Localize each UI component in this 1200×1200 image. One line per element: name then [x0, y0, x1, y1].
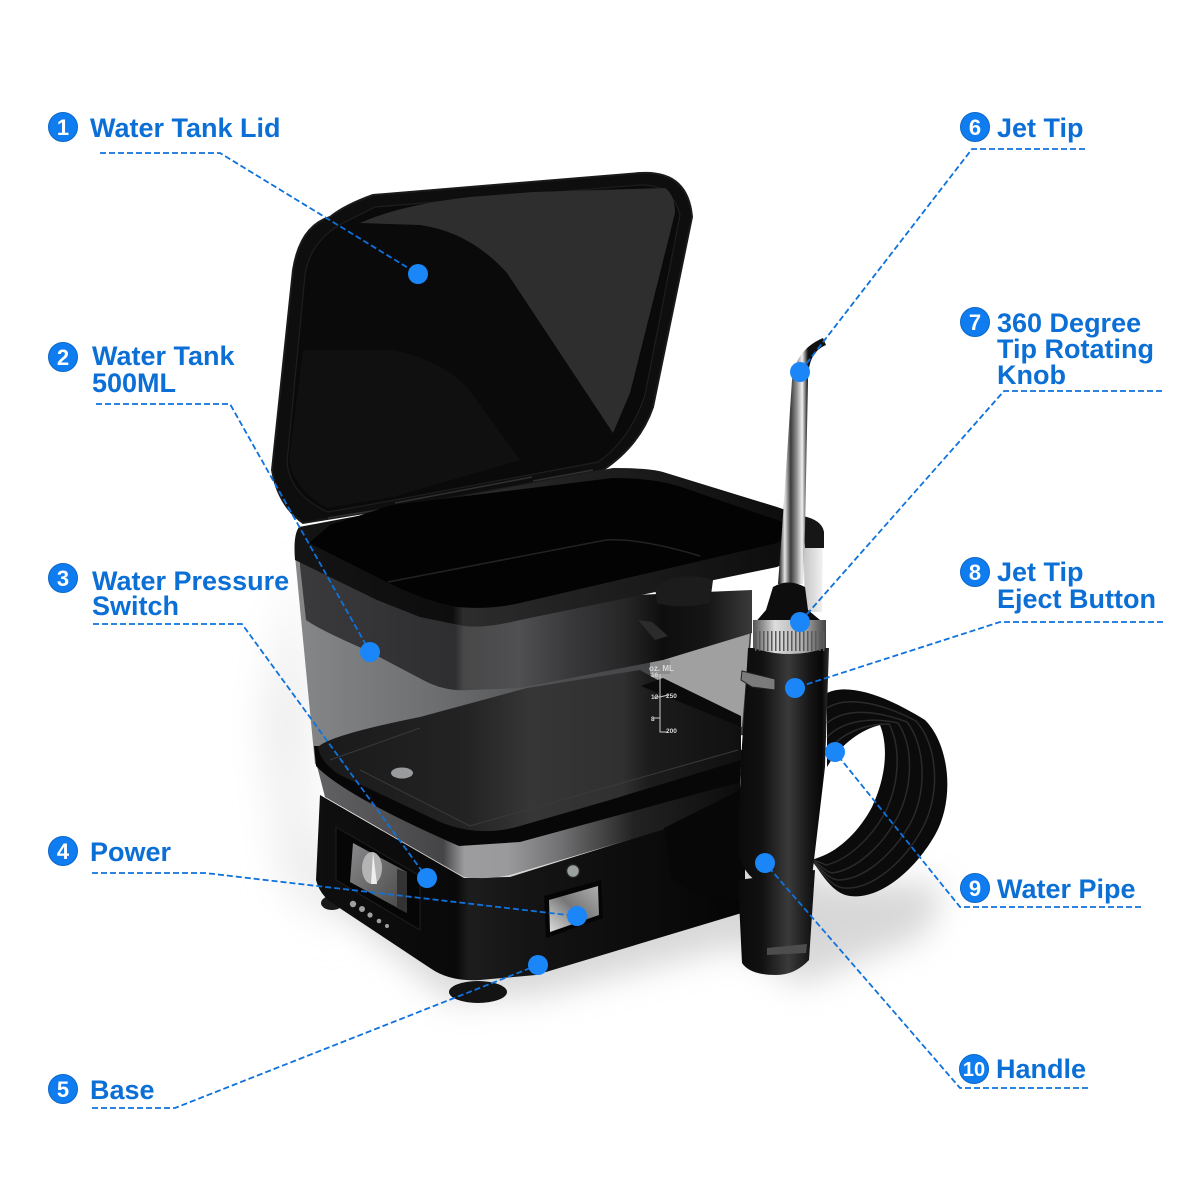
tank floor rim: [314, 746, 742, 846]
jet tip: [778, 338, 826, 584]
product: water flosser: [272, 173, 947, 1003]
label 10: Handle: Handle: [996, 1054, 1086, 1084]
label 3: Water Pressure Switch: 3: [57, 566, 69, 591]
base foot: [449, 981, 507, 1003]
soft shadow behind product: [270, 560, 945, 1000]
label 9: Water Pipe: Water Pipe: [997, 874, 1136, 904]
tank latch: [638, 620, 668, 640]
indicator light: [566, 864, 580, 878]
water tank lid: [272, 173, 692, 523]
power switch: [544, 880, 603, 938]
internal tubes: [664, 790, 745, 900]
scale: 200: [666, 728, 677, 735]
label 1: Water Tank Lid: 1: [57, 115, 69, 140]
label 7: 360 Degree Tip Rotating Knob: 360 Degree: [997, 308, 1141, 338]
label 10: Handle: 10: [963, 1059, 985, 1081]
tip cone: [753, 582, 826, 625]
label 2: Water Tank 500ML: 500ML: [92, 368, 176, 398]
label 5: Base: 5: [57, 1077, 69, 1102]
label 6: Jet Tip: [960, 112, 1084, 143]
clear sleeve: [803, 518, 823, 612]
scale: 8: [651, 716, 655, 723]
rear foot: [321, 896, 343, 910]
label 5: Base: [48, 1074, 155, 1105]
label 3: Water Pressure Switch: Water Pressure: [92, 566, 289, 596]
eject button: [741, 671, 775, 690]
label 7: 360 Degree Tip Rotating Knob: 7: [969, 310, 981, 335]
label 4: Power: Power: [90, 837, 172, 867]
callout dots: [360, 264, 845, 975]
tank smoked band: [300, 540, 752, 690]
tank floor: [318, 670, 741, 831]
label 1: Water Tank Lid: Water Tank Lid: [90, 113, 281, 143]
water tank: [294, 468, 822, 846]
scale: 16: [651, 672, 659, 679]
pressure dial panel: [336, 827, 420, 930]
label 4: Power: [48, 836, 172, 867]
label 8: Jet Tip Eject Button: [960, 557, 1156, 614]
floor outline: [330, 728, 738, 826]
base: [316, 785, 745, 980]
scale: oz. ML: [649, 664, 674, 673]
label 2: Water Tank 500ML: [48, 341, 236, 398]
water pipe: [812, 689, 947, 896]
label 2: Water Tank 500ML: 2: [57, 345, 69, 370]
knurled collar: [753, 620, 826, 654]
sleeve top: [803, 516, 824, 548]
tank rim: [294, 468, 822, 627]
scale: 12: [651, 694, 659, 701]
label 8: Jet Tip Eject Button: Jet Tip: [997, 557, 1084, 587]
label 8: Jet Tip Eject Button: Eject Button: [997, 584, 1156, 614]
callout lines: [92, 149, 1163, 1108]
adjuster knob: [655, 576, 713, 606]
tank opening: [309, 478, 800, 608]
tank clear wall: [295, 556, 752, 764]
label 7: 360 Degree Tip Rotating Knob: [960, 308, 1154, 390]
tank right clear window: [641, 632, 750, 727]
label 7: 360 Degree Tip Rotating Knob: Knob: [997, 360, 1066, 390]
label 7: 360 Degree Tip Rotating Knob: Tip Rotating: [997, 334, 1154, 364]
label 6: Jet Tip: 6: [969, 115, 981, 140]
handle: [738, 648, 829, 892]
silver band: [316, 762, 740, 878]
label 6: Jet Tip: Jet Tip: [997, 113, 1084, 143]
back wall stripe: [641, 678, 741, 727]
scale: [649, 660, 677, 735]
scale: 250: [666, 693, 677, 700]
label 3: Water Pressure Switch: Switch: [92, 591, 179, 621]
tank inner ledge: [388, 540, 700, 582]
floor drain: [391, 768, 413, 778]
label 9: Water Pipe: 9: [969, 876, 981, 901]
label 5: Base: Base: [90, 1075, 155, 1105]
label 2: Water Tank 500ML: Water Tank: [92, 341, 236, 371]
label 3: Water Pressure Switch: [48, 564, 289, 621]
label 8: Jet Tip Eject Button: 8: [969, 560, 981, 585]
handle base: [738, 870, 815, 975]
label 4: Power: 4: [57, 839, 70, 864]
